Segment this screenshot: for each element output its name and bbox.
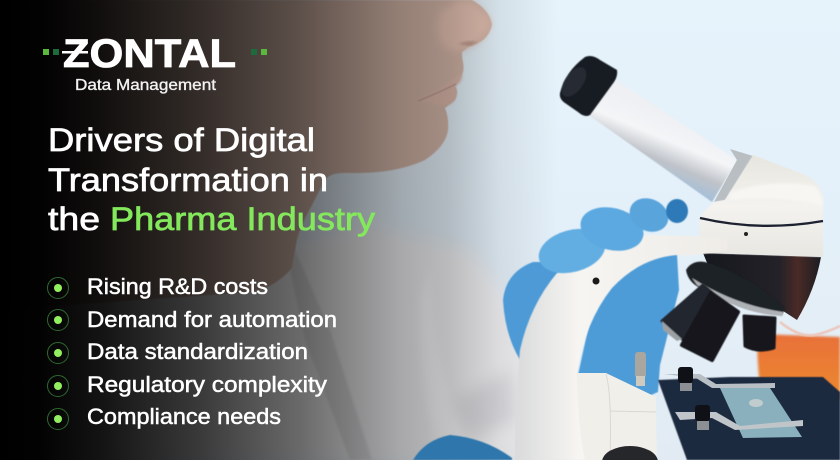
- lab coat: [0, 225, 530, 460]
- palm of blue glove: [503, 254, 679, 400]
- title: Pharma Industry: [110, 201, 375, 237]
- title: Drivers of Digital: [48, 122, 315, 158]
- glass slide: [720, 388, 802, 438]
- objective: front: [682, 293, 738, 360]
- curved arm: [515, 235, 727, 460]
- focus knob: [602, 446, 658, 460]
- logo squares right: [251, 49, 267, 55]
- item: automation: Demand for automation: [87, 307, 337, 332]
- finger five: [666, 199, 688, 223]
- driver list: [48, 274, 337, 430]
- tube: [590, 76, 737, 202]
- head: [699, 155, 823, 257]
- logo: [43, 32, 267, 94]
- lips: [418, 73, 462, 106]
- collar: [714, 149, 753, 202]
- objective: rear: [662, 285, 720, 339]
- objective lenses: [662, 285, 775, 360]
- finger four: [624, 192, 674, 238]
- person: lab coat and face: [0, 0, 530, 460]
- revolving disc: [686, 262, 785, 316]
- logo squares left: [43, 49, 59, 55]
- finger two: [534, 222, 610, 280]
- title: [48, 122, 375, 237]
- stage: [658, 377, 840, 460]
- title: Transformation in: [48, 162, 328, 198]
- gripping fingers of blue glove: [534, 192, 688, 280]
- logo wordmark: ZONTAL: [63, 32, 236, 76]
- pin: [635, 352, 646, 378]
- base block: [577, 373, 656, 460]
- eyepiece: [557, 56, 617, 116]
- lower nosepiece housing: [703, 253, 821, 320]
- logo mark bar: [62, 51, 88, 54]
- stage clips: [664, 374, 775, 388]
- item: standardization: Data standardization: [87, 339, 308, 364]
- item: compliance: Compliance needs: [87, 404, 281, 429]
- objective: right: [744, 316, 775, 350]
- beaker with orange liquid: [757, 322, 840, 400]
- finger three: [576, 201, 648, 257]
- title: the: [48, 201, 100, 237]
- item: rising costs: Rising R&D costs: [87, 274, 268, 299]
- stage knobs: [678, 367, 710, 430]
- item: regulatory: Regulatory complexity: [87, 372, 327, 397]
- logo subtitle: Data Management: [75, 77, 217, 94]
- face and neck: [0, 0, 492, 310]
- nose shading: [437, 0, 490, 50]
- microscope: [515, 56, 840, 460]
- bottom glove: [413, 435, 512, 460]
